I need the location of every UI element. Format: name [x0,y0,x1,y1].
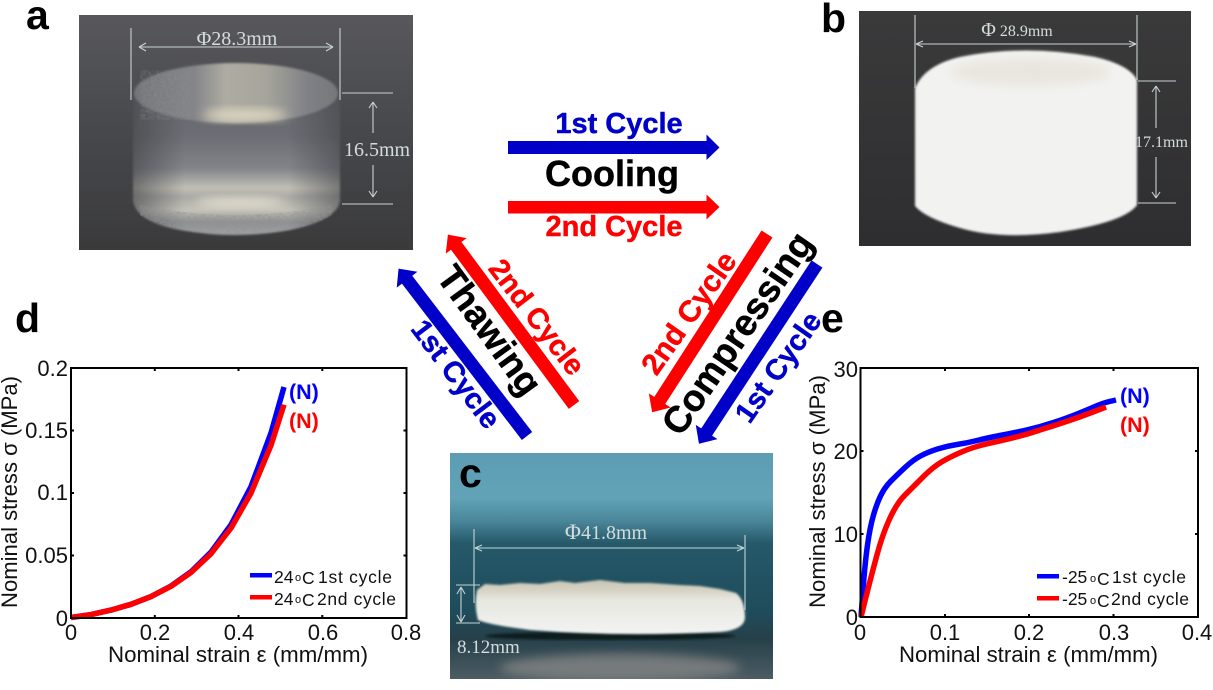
dimension annotations b: 17.1mm [1135,134,1188,151]
dimension annotations a: Φ28.3mm [197,28,278,50]
legend e: -25 [1062,567,1087,587]
x tick labels e: 0 [854,620,866,645]
legend e: 2nd cycle [1111,589,1189,609]
legend d: C [302,568,315,588]
arrow: cooling 1st cycle [508,134,720,160]
series tags d: (N) [289,380,319,404]
x tick labels d: 0 [65,620,77,645]
x tick labels e [854,620,1212,645]
chart d: stress-strain at 24C [0,356,421,667]
arrow: compressing 2nd cycle [641,227,778,419]
y tick labels e: 20 [834,439,858,464]
chart e: stress-strain at -25C [805,357,1212,667]
label: 1st cycle thawing: 1st Cycle [404,314,506,435]
label: 2nd cycle thawing: 2nd Cycle [482,254,591,382]
x tick labels d: 0.6 [308,620,338,645]
series tags d [289,380,319,433]
legend d: 24 [274,589,293,609]
legend d [250,567,396,610]
x tick labels e: 0.1 [930,620,960,645]
legend e [1037,567,1189,611]
thawing cycle arrows [388,227,591,444]
label: 2nd cycle cooling: 2nd Cycle [546,211,682,243]
plot frame d [71,368,406,618]
y tick labels d: 0.15 [25,418,68,443]
label: Compressing: Compressing [654,224,821,442]
series tags d: (N) [289,409,319,433]
y tick labels d: 0.05 [25,543,68,568]
dimension annotations a [131,28,411,204]
x axis title d: Nominal strain ε (mm/mm) [108,642,368,667]
y tick labels d: 0 [56,606,68,631]
dimension annotations b [915,15,1188,203]
label: 1st cycle compressing: 1st Cycle [729,306,828,429]
x axis title e: Nominal strain ε (mm/mm) [899,642,1158,667]
y tick labels e [834,357,858,630]
y axis title e: Nominal stress σ (MPa) [805,375,830,608]
legend d: 2nd cycle [317,589,396,609]
cooling cycle arrows [508,108,720,243]
x tick labels e: 0.2 [1014,620,1044,645]
legend d: C [302,590,315,610]
x tick labels d: 0.8 [391,620,421,645]
panel label e: e [821,295,844,341]
legend d: 24 [274,567,293,587]
x tick labels d: 0.4 [224,620,254,645]
series tags e: (N) [1120,413,1150,437]
legend e: C [1097,591,1110,611]
legend d: o [295,594,301,606]
dimension annotations c: Φ41.8mm [565,519,648,544]
legend e: C [1097,569,1110,589]
arrow: thawing 2nd cycle [437,227,584,413]
label: 2nd cycle compressing: 2nd Cycle [635,246,744,381]
arrow: thawing 1st cycle [388,261,537,444]
arrow: cooling 2nd cycle [508,194,720,220]
y tick labels e: 30 [834,357,858,382]
x tick labels d [65,620,421,645]
panel a: transparent cylinder photo [79,15,413,250]
dimension annotations b: Φ 28.9mm [981,19,1053,41]
arrow: compressing 1st cycle [688,257,828,451]
plot frame e [860,368,1198,617]
panel b: white cylinder photo [859,11,1191,246]
label: Thawing: Thawing [429,258,550,403]
panel label c: c [459,450,482,496]
x tick labels e: 0.4 [1182,620,1212,645]
legend e: 1st cycle [1112,567,1186,587]
series tags e: (N) [1120,384,1150,408]
x tick labels e: 0.3 [1099,620,1129,645]
y tick labels d: 0.1 [37,480,68,505]
curves d [71,387,284,618]
legend d: o [295,572,301,584]
label: Cooling: Cooling [545,153,679,194]
y tick labels e: 0 [846,605,858,630]
dimension annotations c [456,519,745,658]
panel label d: d [15,295,40,341]
x tick labels d: 0.2 [140,620,170,645]
legend e: -25 [1062,589,1087,609]
y tick labels d: 0.2 [37,356,68,381]
y tick labels d [25,356,68,631]
y tick labels e: 10 [834,522,858,547]
legend e: o [1090,573,1096,585]
dimension annotations a: 16.5mm [344,139,411,161]
compressing cycle arrows [635,224,828,451]
curves e [861,400,1116,617]
legend e: o [1090,595,1096,607]
legend d: 1st cycle [318,567,392,587]
dimension annotations c: 8.12mm [457,637,520,658]
panel c: compressed disc photo [450,453,773,682]
series tags e [1120,384,1150,437]
label: 1st cycle cooling: 1st Cycle [555,108,683,140]
